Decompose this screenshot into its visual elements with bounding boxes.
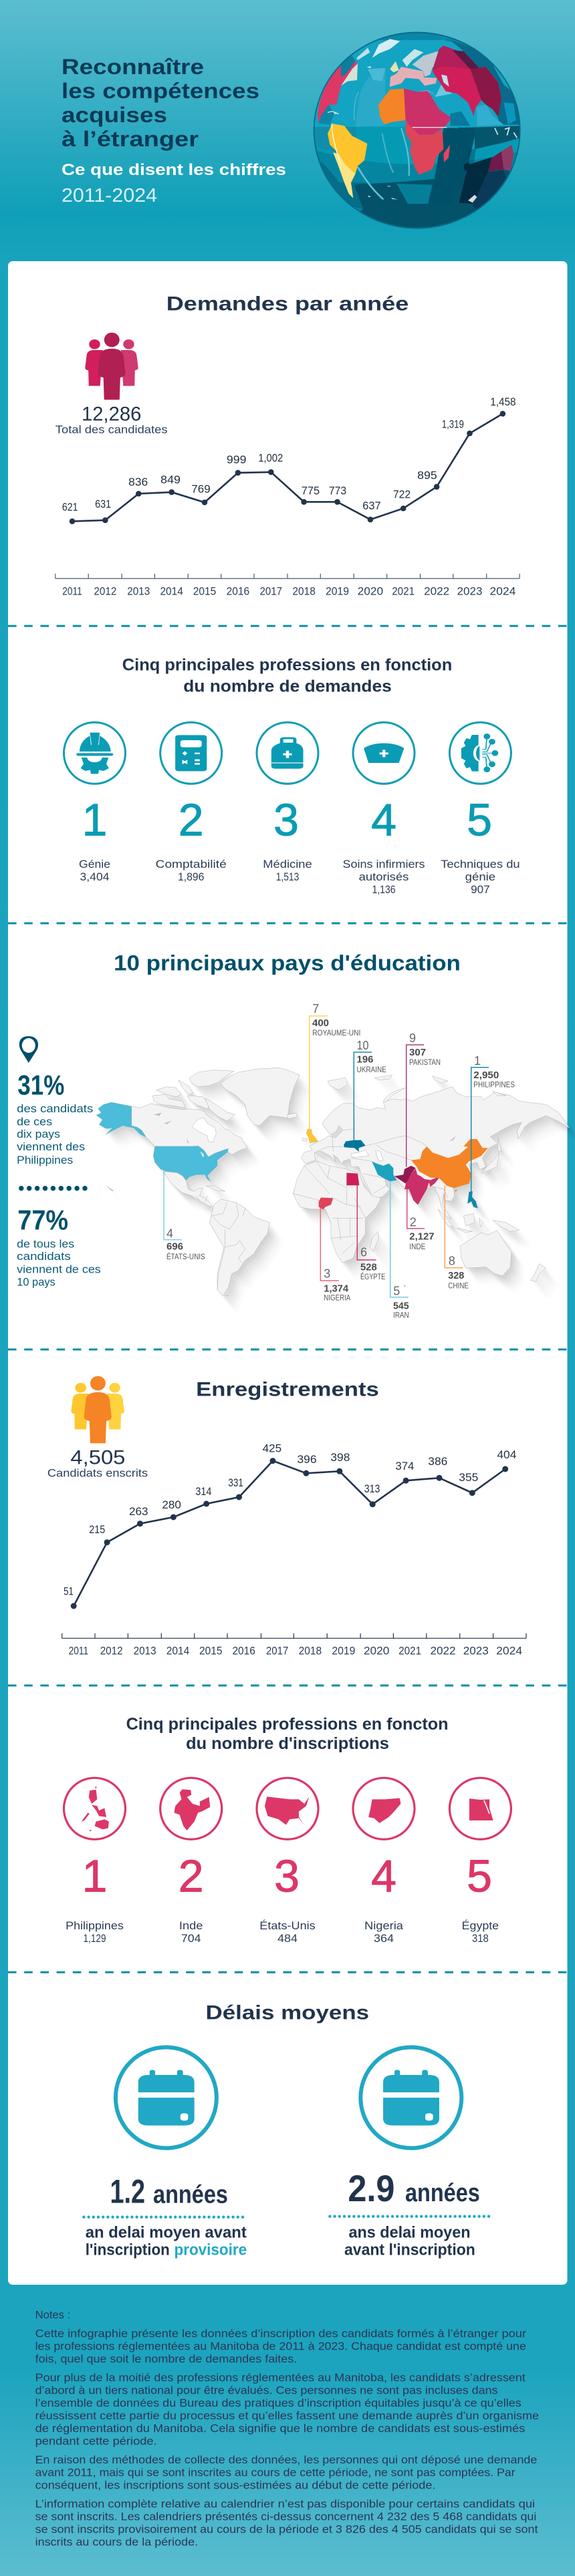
stat: total applicants: Total des candidates [55, 424, 168, 436]
line chart: enregistrements: 331 [228, 1477, 243, 1489]
line chart: enregistrements: 2011 [69, 1645, 88, 1657]
text block: notes [35, 2309, 539, 2549]
stat: 1.2 years: années [153, 2181, 228, 2209]
callout: Nigeria: NIGERIA [324, 1295, 351, 1303]
callout: Nigeria: 1,374 [324, 1283, 348, 1294]
line chart: enregistrements: 2020 [364, 1645, 389, 1657]
text block: notes: se sont inscrits. Les calendriers présentés ci-dessus concernent 4 232 des 5 468 candidats qui [35, 2511, 536, 2523]
labels: professions [79, 858, 520, 896]
callout: Chine [445, 1186, 469, 1290]
line chart: enregistrements: 313 [364, 1483, 380, 1495]
ranks: countries: 1 [82, 1851, 107, 1902]
labels: professions: 3,404 [80, 871, 110, 883]
callout: Philippines: 2,950 [473, 1070, 499, 1081]
title block: Reconnaître [62, 55, 204, 79]
line chart: enregistrements: 215 [89, 1524, 105, 1536]
line chart: demandes: 2016 [227, 586, 249, 598]
text block: notes: d’abord à un tiers national pour être évalués. Ces personnes ne sont pas incluses dans [35, 2385, 498, 2397]
callout: Philippines: PHILIPPINES [473, 1081, 515, 1089]
title block: les compétences [62, 79, 259, 103]
heading: enregistrements: Enregistrements [196, 1378, 379, 1400]
labels: countries: 318 [472, 1933, 489, 1945]
callout: Royaume-Uni: 7 [312, 1002, 319, 1015]
labels: professions: Médicine [263, 858, 312, 870]
line chart: demandes: 769 [191, 484, 211, 496]
text block: notes: l’ensemble de données du Bureau des pratiques d’inscription équitables jusqu’à ce qu’elles [35, 2398, 522, 2410]
icon: location pin [19, 1036, 38, 1063]
callout: Égypte [357, 1185, 386, 1281]
panel: white card [8, 261, 567, 2285]
line chart: demandes: 2012 [94, 586, 116, 598]
callout: États-Unis: 4 [166, 1227, 173, 1240]
ranks: professions: 3 [273, 795, 299, 846]
icon row: professions [64, 722, 511, 784]
ranks: professions [82, 795, 492, 846]
line chart: enregistrements: 398 [330, 1452, 350, 1464]
line chart: demandes: 2019 [326, 586, 349, 598]
text block: notes: pendant cette période. [35, 2436, 157, 2448]
labels: professions: 1,896 [178, 871, 204, 883]
line chart: enregistrements: 374 [395, 1460, 414, 1472]
labels: professions: 1,136 [372, 884, 396, 896]
stat: 1.2 years: an delai moyen avant [86, 2223, 247, 2241]
icon: calendar left [116, 2047, 217, 2148]
labels: professions: génie [465, 871, 495, 883]
line chart: demandes: 1,458 [490, 396, 516, 408]
line chart: demandes: 1,319 [442, 419, 464, 431]
title block: acquises [62, 103, 167, 127]
line chart: enregistrements: 2018 [299, 1645, 322, 1657]
stat: 77 percent: de tous les [17, 1238, 74, 1250]
callout: Nigeria [320, 1208, 351, 1303]
callout: Égypte: ÉGYPTE [360, 1273, 386, 1281]
callout: Inde: INDE [409, 1243, 426, 1251]
callout: Pakistan: PAKISTAN [409, 1059, 441, 1067]
stat: 1.2 years [84, 2173, 247, 2259]
callout: Royaume-Uni [310, 1002, 360, 1129]
heading: top five professions by applications: du nombre de demandes [183, 677, 392, 695]
line chart: enregistrements: 2021 [398, 1645, 421, 1657]
line chart: enregistrements [62, 1443, 526, 1657]
callout: Pakistan [407, 1031, 441, 1167]
line chart: enregistrements: 396 [297, 1454, 317, 1466]
callout: Iran: 545 [393, 1301, 409, 1312]
stat: 2.9 years: années [405, 2179, 480, 2207]
callout: Nigeria: 3 [324, 1267, 330, 1281]
line chart: demandes: 2017 [260, 586, 282, 598]
text block: notes: En raison des méthodes de collecte des données, les personnes qui ont déposé une demande [35, 2454, 537, 2466]
line chart: demandes: 836 [128, 476, 148, 488]
text block: notes: de réglementation du Manitoba. Cela signifie que le nombre de candidats est sous-estimés [35, 2423, 525, 2435]
labels: countries [66, 1919, 499, 1945]
callout: États-Unis: ÉTATS-UNIS [166, 1253, 205, 1261]
heading: top five professions by applications: Cinq principales professions en fonction [122, 655, 452, 674]
callout: Ukraine: 10 [357, 1039, 369, 1052]
labels: countries: Inde [179, 1920, 203, 1932]
labels: professions: autorisés [359, 871, 409, 883]
text block: notes: conséquent, les inscriptions sont sous-estimées au début de cette période. [35, 2480, 436, 2492]
callout: États-Unis: 696 [166, 1242, 183, 1253]
callout: Philippines [471, 1054, 515, 1192]
callout: Ukraine: UKRAINE [357, 1066, 386, 1074]
line chart: enregistrements: 386 [428, 1456, 447, 1468]
line chart: demandes: 2023 [457, 586, 483, 598]
callout: Royaume-Uni: ROYAUME-UNI [312, 1029, 360, 1037]
labels: countries: 364 [374, 1933, 394, 1945]
world map [96, 1068, 575, 1313]
line chart: demandes: 849 [160, 474, 181, 486]
heading: top five by registrations [126, 1715, 449, 1753]
labels: countries: 704 [181, 1933, 201, 1945]
ranks: professions: 2 [179, 795, 204, 846]
text block: notes: Pour plus de la moitié des professions réglementées au Manitoba, les candidats s’adressent [35, 2372, 526, 2384]
labels: countries: 484 [277, 1933, 298, 1945]
callout: Royaume-Uni: 400 [312, 1018, 329, 1029]
line chart: demandes: 2013 [127, 586, 150, 598]
icon: people group orange [71, 1376, 124, 1443]
text block: notes: Cette infographie présente les données d’inscription des candidats formés à l’étranger pour [35, 2327, 526, 2340]
callout: Ukraine: 196 [357, 1055, 373, 1066]
stat: 31 percent: dix pays [17, 1128, 60, 1140]
labels: countries: Nigeria [364, 1920, 404, 1932]
line chart: demandes: 637 [362, 500, 381, 512]
line chart: demandes: 722 [393, 489, 411, 501]
labels: professions: Comptabilité [156, 858, 227, 870]
ranks: countries: 3 [274, 1851, 300, 1902]
stat: 2.9 years: 2.9 [348, 2167, 394, 2209]
stat: 77 percent: 10 pays [17, 1277, 55, 1289]
heading: top ten countries: 10 principaux pays d'éducation [114, 951, 461, 975]
line chart: enregistrements: 2016 [232, 1645, 255, 1657]
labels: professions: Soins infirmiers [342, 858, 425, 870]
labels: professions: 1,513 [276, 871, 299, 883]
line chart: demandes: 2015 [193, 586, 216, 598]
text block: notes: réussissent cette partie du processus et qu’elles fassent une demande auprès d’un organisme [35, 2410, 539, 2422]
stat: 1.2 years: provisoire [174, 2241, 247, 2259]
line chart: demandes: 2011 [62, 586, 82, 598]
callout: Iran [390, 1182, 409, 1320]
stat: 2.9 years: ans delai moyen [349, 2223, 471, 2241]
stat: total registered [47, 1446, 148, 1480]
icon: calendar right [360, 2047, 461, 2148]
line chart: demandes [55, 396, 520, 598]
callout: Inde: 2,127 [409, 1232, 435, 1243]
callout: Chine: 328 [448, 1271, 464, 1281]
stat: 77 percent: 77% [17, 1204, 68, 1235]
ranks: countries: 5 [467, 1851, 492, 1902]
stat: 31 percent [17, 1069, 93, 1166]
line chart: enregistrements: 425 [263, 1443, 281, 1455]
title block: 2011-2024 [62, 185, 157, 206]
icon row: countries [64, 1778, 511, 1839]
callout: Ukraine [354, 1039, 386, 1140]
stat: 31 percent: viennent des [17, 1141, 85, 1153]
ranks: countries [82, 1851, 492, 1902]
line chart: demandes: 2018 [292, 586, 316, 598]
stat: total registered: 4,505 [70, 1446, 125, 1468]
callout: Inde [407, 1189, 435, 1251]
line chart: demandes: 1,002 [258, 452, 283, 464]
heading: top five by registrations: du nombre d'inscriptions [186, 1734, 389, 1753]
line chart: demandes: 2022 [424, 586, 449, 598]
title block: Ce que disent les chiffres [62, 161, 286, 179]
labels: countries: États-Unis [259, 1919, 316, 1932]
callout: Iran: IRAN [393, 1312, 409, 1320]
line chart: enregistrements: 280 [162, 1499, 181, 1511]
stat: 2.9 years [330, 2167, 493, 2259]
ranks: countries: 4 [371, 1851, 396, 1902]
text block: notes: se sont inscrits provisoirement au cours de la période et 3 826 des 4 505 candidats qui se sont [35, 2524, 538, 2536]
line chart: enregistrements: 314 [195, 1486, 211, 1498]
text block: notes: les professions réglementées au Manitoba de 2011 à 2023. Chaque candidat est compté une [35, 2340, 526, 2352]
title block [62, 55, 286, 206]
line chart: enregistrements: 2015 [199, 1645, 223, 1657]
labels: countries: 1,129 [83, 1933, 106, 1945]
line chart: enregistrements: 2013 [134, 1645, 156, 1657]
line chart: enregistrements: 2023 [463, 1645, 489, 1657]
labels: professions: 907 [471, 884, 490, 896]
line chart: enregistrements: 2024 [496, 1645, 522, 1657]
stat: 31 percent: de ces [17, 1116, 52, 1128]
callout: Chine: 8 [449, 1254, 455, 1267]
heading: top five professions by applications [122, 655, 452, 695]
stat: 1.2 years: 1.2 [110, 2173, 145, 2211]
line chart: enregistrements: 2022 [431, 1645, 456, 1657]
stat: 31 percent: 31% [17, 1069, 64, 1100]
line chart: enregistrements: 51 [64, 1586, 74, 1598]
line chart: enregistrements: 2019 [332, 1645, 355, 1657]
heading: demandes par année: Demandes par année [166, 293, 409, 315]
stat: total registered: Candidats enscrits [47, 1468, 148, 1480]
stat: 31 percent: des candidats [17, 1103, 93, 1115]
labels: countries: Égypte [462, 1919, 499, 1932]
callout: États-Unis [164, 1171, 205, 1261]
text block: notes: fois, quel que soit le nombre de demandes faites. [35, 2354, 297, 2366]
text block: notes: Notes : [35, 2309, 70, 2321]
line chart: enregistrements: 2017 [266, 1645, 288, 1657]
callout: Iran: 5 [393, 1284, 400, 1297]
stat: 77 percent [17, 1204, 101, 1289]
text block: notes: inscrits au cours de la période. [35, 2537, 198, 2549]
callout: Philippines: 1 [474, 1054, 481, 1068]
stat: 77 percent: candidats [17, 1251, 71, 1263]
line chart: demandes: 895 [417, 470, 437, 482]
labels: professions: Génie [79, 858, 110, 870]
heading: délais moyens: Délais moyens [206, 2002, 369, 2024]
callout: Égypte: 6 [360, 1246, 367, 1259]
illustration: globe [312, 31, 526, 232]
callout: Pakistan: 307 [409, 1048, 426, 1058]
line chart: enregistrements: 2012 [100, 1645, 123, 1657]
line chart: demandes: 2020 [358, 586, 383, 598]
line chart: enregistrements: 2014 [166, 1645, 189, 1657]
text block: notes: L’information complète relative au calendrier n’est pas disponible pour certains candidats qui [35, 2499, 535, 2511]
line chart: demandes: 2014 [160, 586, 183, 598]
title block: à l’étranger [62, 127, 199, 151]
icon: people group [85, 333, 138, 399]
stat: 31 percent: Philippines [17, 1154, 73, 1166]
callout: Égypte: 528 [360, 1263, 377, 1273]
stat: 1.2 years: l'inscription [86, 2241, 170, 2259]
heading: top five by registrations: Cinq principales professions en foncton [126, 1715, 449, 1734]
line chart: demandes: 999 [227, 454, 247, 466]
callout: Pakistan: 9 [409, 1031, 416, 1045]
stat: 77 percent: viennent de ces [17, 1263, 101, 1275]
line chart: demandes: 773 [329, 485, 346, 497]
text block: notes: avant 2011, mais qui se sont inscrites au cours de cette période, ne sont pas comptées. Par [35, 2467, 515, 2479]
callout: Inde: 2 [410, 1216, 417, 1229]
line chart: enregistrements: 404 [497, 1449, 516, 1461]
line chart: demandes: 2021 [392, 586, 415, 598]
ranks: professions: 1 [82, 795, 107, 846]
line chart: demandes: 631 [95, 498, 111, 510]
line chart: demandes: 775 [302, 485, 320, 497]
labels: countries: Philippines [66, 1920, 124, 1932]
stat: 2.9 years: avant l'inscription [344, 2241, 475, 2259]
line chart: enregistrements: 355 [459, 1472, 478, 1484]
ranks: countries: 2 [179, 1851, 204, 1902]
ranks: professions: 4 [371, 795, 396, 846]
ranks: professions: 5 [467, 795, 492, 846]
stat: total applicants [55, 403, 168, 436]
callout: Chine: CHINE [448, 1282, 469, 1290]
line chart: demandes: 2024 [489, 586, 515, 598]
line chart: demandes: 621 [62, 502, 78, 514]
stat: total applicants: 12,286 [82, 403, 141, 425]
labels: professions: Techniques du [441, 858, 520, 870]
line chart: enregistrements: 263 [129, 1506, 148, 1518]
